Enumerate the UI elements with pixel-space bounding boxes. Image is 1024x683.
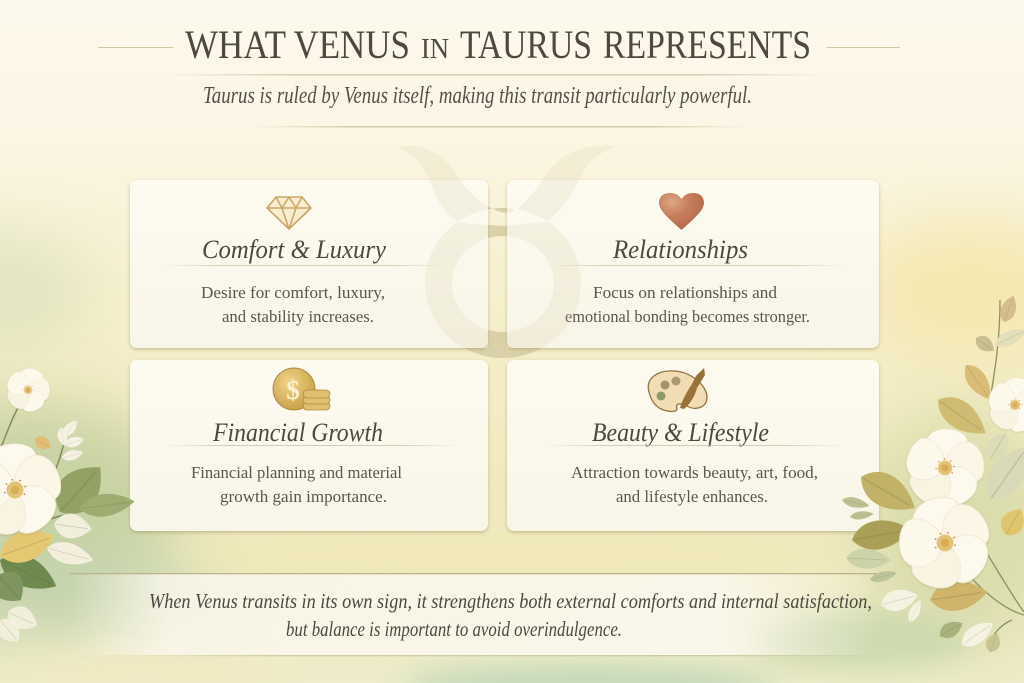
closing text: When Venus transits in its own sign, it strengthens both external comforts and internal satisfaction,: [149, 589, 872, 613]
panel: Beauty & Lifestyle: [507, 360, 879, 531]
body text: Financial planning and material: [191, 463, 402, 482]
watermark: Taurus symbol: [397, 146, 617, 358]
title: IN: [421, 33, 449, 65]
icon: palette and brush: [648, 368, 707, 412]
body text: [565, 283, 810, 326]
closing text: but balance is important to avoid overindulgence.: [286, 617, 622, 641]
heading: Comfort & Luxury: [202, 235, 386, 264]
icon: heart: [659, 193, 704, 230]
icon: diamond: [267, 197, 311, 229]
floral cluster: right: [841, 293, 1024, 654]
panel: closing note: [70, 573, 885, 656]
panel: Financial Growth: [130, 360, 488, 531]
heading: Beauty & Lifestyle: [592, 418, 769, 447]
watermark: Taurus symbol showing in the gaps: [464, 206, 542, 358]
body text: emotional bonding becomes stronger.: [565, 307, 810, 326]
heading: Relationships: [612, 235, 748, 264]
title: [98, 22, 900, 76]
title: WHAT VENUS: [185, 22, 410, 67]
body text: growth gain importance.: [220, 487, 387, 506]
title: REPRESENTS: [603, 22, 811, 67]
subtitle: Taurus is ruled by Venus itself, making this transit particularly powerful.: [203, 83, 752, 109]
floral cluster: left: [0, 360, 136, 648]
panel: Relationships: [507, 180, 879, 348]
body text: Desire for comfort, luxury,: [201, 283, 385, 302]
body text: Focus on relationships and: [593, 283, 777, 302]
panel: Comfort & Luxury: [130, 180, 488, 348]
body text: and lifestyle enhances.: [616, 487, 768, 506]
icon: coins: [273, 368, 330, 410]
closing text: [149, 589, 872, 641]
heading: Financial Growth: [212, 418, 383, 447]
body text: [571, 463, 818, 506]
body text: [191, 463, 402, 506]
title: TAURUS: [460, 22, 592, 67]
icon: coins: $: [286, 375, 300, 405]
body text: [201, 283, 385, 326]
body text: and stability increases.: [222, 307, 374, 326]
body text: Attraction towards beauty, art, food,: [571, 463, 818, 482]
